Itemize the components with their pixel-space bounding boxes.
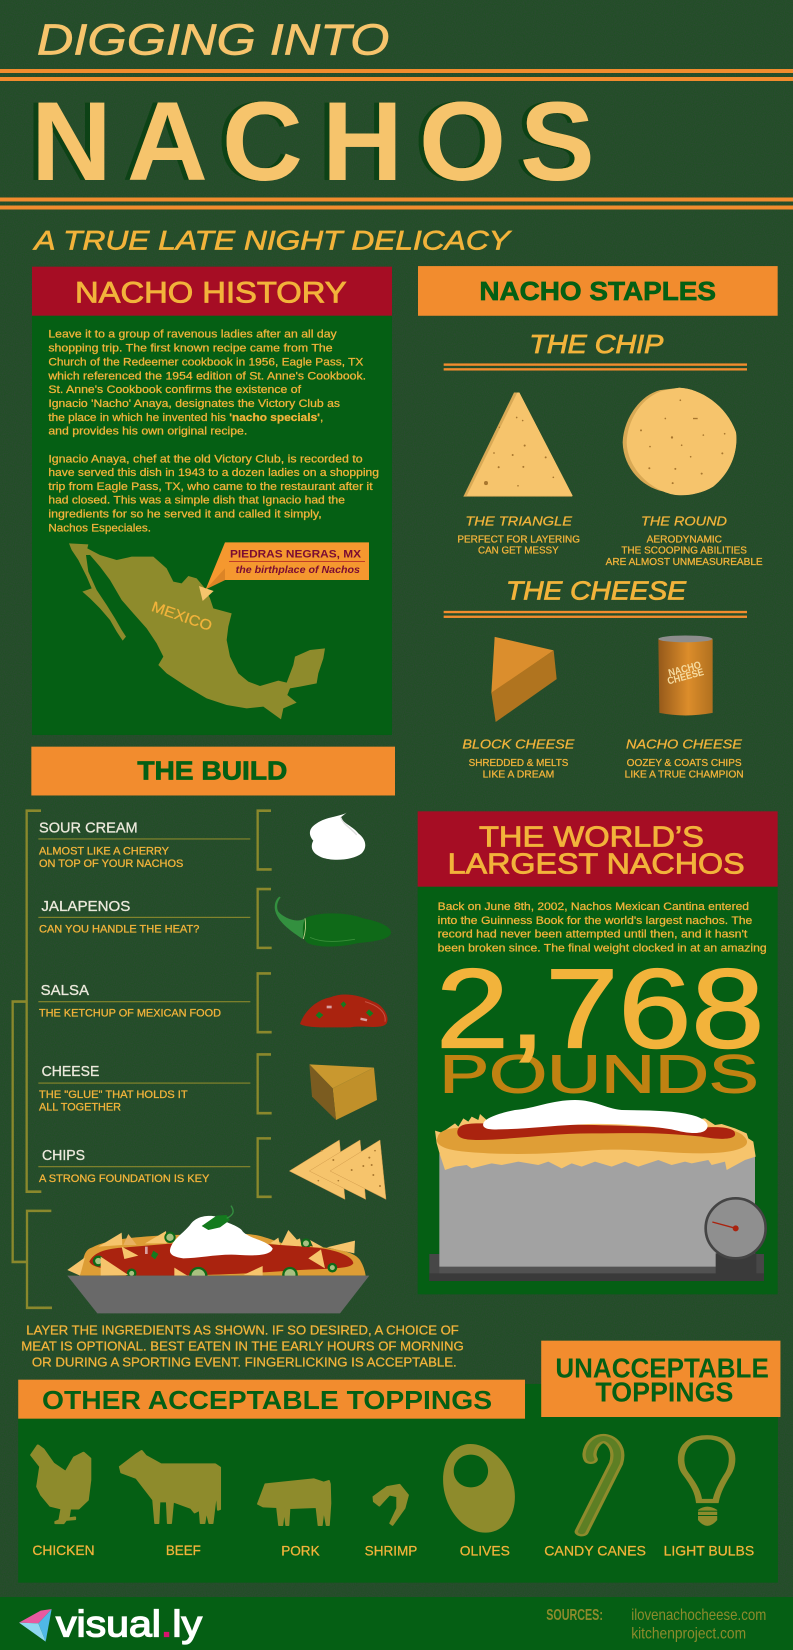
the round caption: THE ROUND — [641, 513, 728, 528]
panel: nacho history — [32, 267, 392, 735]
the triangle caption — [457, 513, 580, 557]
nacho cheese caption: OOZEY & COATS CHIPS — [627, 758, 742, 769]
layer: sour cream: ON TOP OF YOUR NACHOS — [39, 857, 183, 870]
topping labels: SHRIMP — [365, 1543, 417, 1559]
history text: which referenced the 1954 edition of St. Anne's Cookbook. — [47, 370, 366, 382]
panel background — [418, 887, 778, 1294]
callout: piedras negras: the birthplace of Nachos — [236, 565, 360, 576]
panel background — [32, 316, 392, 735]
salsa bits — [145, 1247, 148, 1254]
block cheese caption: LIKE A DREAM — [483, 769, 554, 781]
the round caption: AERODYNAMIC — [647, 535, 722, 546]
chips layer — [435, 1114, 756, 1170]
the triangle caption: PERFECT FOR LAYERING — [457, 535, 580, 546]
layer: cheese: CHEESE — [42, 1062, 99, 1079]
history text: and provides his own original recipe. — [48, 426, 247, 438]
salsa layer — [457, 1123, 735, 1140]
heading: other acceptable toppings: OTHER ACCEPTABLE TOPPINGS — [42, 1386, 492, 1414]
record text: been broken since. The final weight clocked in at an amazing — [438, 943, 767, 955]
layer: cheese: ALL TOGETHER — [39, 1101, 121, 1114]
layer: chips — [38, 1146, 250, 1185]
icon: scale gauge — [706, 1198, 766, 1258]
title: digging into: DIGGING INTO — [37, 15, 389, 64]
block cheese caption: SHREDDED & MELTS — [469, 758, 569, 769]
logo: visual.ly: visual.ly — [56, 1604, 203, 1645]
icon: cheese can: CHEESE — [666, 667, 705, 687]
icon: pig — [258, 1479, 330, 1525]
nacho slab on scale — [439, 1153, 755, 1267]
build heading bar — [31, 747, 395, 795]
record text: record had never been attempted until then, and it hasn't — [438, 929, 747, 941]
cheese base — [80, 1234, 366, 1276]
topping labels: CANDY CANES — [544, 1543, 646, 1559]
topping labels — [32, 1543, 754, 1559]
topping labels: CHICKEN — [32, 1543, 95, 1558]
history text: the place in which he invented his 'nacho specials', — [48, 412, 323, 424]
nacho cheese caption: NACHO CHEESE — [626, 736, 742, 751]
subtitle: A TRUE LATE NIGHT DELICACY — [33, 226, 512, 256]
chip rule — [444, 363, 747, 371]
salsa layer — [89, 1242, 353, 1276]
cheese layer — [437, 1127, 747, 1154]
footer — [0, 1597, 793, 1650]
icon: triangle chip — [463, 392, 573, 497]
record text: into the Guinness Book for the world's largest nachos. The — [438, 915, 752, 927]
instructions text: LAYER THE INGREDIENTS AS SHOWN. IF SO DESIRED, A CHOICE OF — [26, 1323, 459, 1337]
icon: cow — [120, 1451, 220, 1523]
icon: candy cane — [582, 1439, 617, 1532]
layer: salsa: SALSA — [41, 982, 90, 998]
history text: Church of the Redeemer cookbook in 1956, Eagle Pass, TX — [48, 356, 364, 368]
right brackets — [258, 811, 272, 1197]
the round caption: ARE ALMOST UNMEASUREABLE — [606, 557, 763, 568]
layer: jalapenos — [38, 897, 250, 935]
sources — [546, 1606, 766, 1642]
title: nachos: NACHOS — [31, 79, 595, 204]
orange double rule top — [0, 69, 793, 81]
heading text: THE WORLD’S — [479, 822, 704, 854]
block cheese caption — [462, 736, 575, 781]
cheese rule — [444, 611, 747, 618]
icon: shrimp — [373, 1484, 408, 1525]
layer: salsa: THE KETCHUP OF MEXICAN FOOD — [39, 1007, 221, 1020]
callout: piedras negras: PIEDRAS NEGRAS, MX — [230, 548, 362, 560]
nacho cheese caption: LIKE A TRUE CHAMPION — [625, 769, 744, 781]
icon: cheese can: NACHO — [667, 660, 702, 679]
topping labels: OLIVES — [460, 1543, 510, 1559]
instructions text — [21, 1323, 464, 1369]
toppings background — [18, 1384, 778, 1583]
layer: sour cream: ALMOST LIKE A CHERRY — [39, 845, 169, 857]
layer: sour cream: SOUR CREAM — [39, 819, 138, 836]
history heading bar — [32, 267, 392, 316]
back jalapeno slices — [165, 1233, 310, 1247]
top chips — [101, 1247, 325, 1276]
icon: chicken — [31, 1445, 90, 1523]
topping labels: PORK — [281, 1543, 320, 1559]
block cheese caption: BLOCK CHEESE — [462, 736, 575, 751]
icon: cheese can — [658, 636, 713, 715]
icon: sour cream — [310, 813, 365, 860]
history text: Nachos Especiales. — [48, 522, 151, 534]
heading: nacho staples: NACHO STAPLES — [479, 278, 716, 306]
left brackets — [13, 811, 52, 1308]
icon: jalapeno — [275, 897, 391, 946]
instructions text: OR DURING A SPORTING EVENT. FINGERLICKING IS ACCEPTABLE. — [32, 1355, 457, 1369]
layer: cheese — [38, 1062, 250, 1114]
sour cream layer — [483, 1100, 708, 1133]
icon: block cheese — [491, 637, 557, 722]
icon: light bulb — [681, 1437, 732, 1526]
jalapeno slices — [94, 1257, 336, 1284]
the round caption: THE SCOOPING ABILITIES — [621, 546, 748, 557]
panel: toppings — [18, 1323, 780, 1583]
heading text: LARGEST NACHOS — [448, 848, 745, 880]
history text: ingredients for so he served it and called it simply, — [48, 509, 322, 521]
layer: jalapenos: CAN YOU HANDLE THE HEAT? — [39, 923, 199, 935]
heading text — [448, 822, 745, 880]
sources: SOURCES: — [546, 1606, 603, 1624]
history text — [47, 329, 379, 534]
heading: nacho history: NACHO HISTORY — [75, 276, 347, 309]
header block — [0, 15, 793, 256]
panel: nacho staples — [418, 266, 778, 781]
layer: salsa — [38, 982, 250, 1020]
callout: piedras negras — [206, 542, 369, 589]
big unit: pounds: POUNDS — [439, 1046, 759, 1105]
history text: Ignacio 'Nacho' Anaya, designates the Victory Club as — [48, 398, 341, 410]
history text: have served this dish in 1943 to a dozen ladies on a shopping — [48, 467, 379, 479]
layer: chips: A STRONG FOUNDATION IS KEY — [39, 1173, 209, 1185]
staples heading bar — [418, 266, 778, 316]
panel: world's largest nachos — [418, 811, 778, 1294]
nacho cheese caption — [625, 736, 744, 781]
acceptable heading bar — [18, 1380, 525, 1419]
layer: sour cream — [38, 819, 250, 870]
scale base — [429, 1254, 764, 1281]
history text: St. Anne's Cookbook confirms the existence of — [48, 384, 302, 396]
heading: the chip: THE CHIP — [529, 331, 664, 359]
the round caption — [606, 513, 763, 568]
history text: had closed. This was a simple dish that Ignacio had the — [48, 495, 345, 507]
scale stand — [716, 1253, 756, 1281]
record text — [438, 901, 767, 955]
heading: the build: THE BUILD — [137, 758, 287, 786]
footer bar — [0, 1597, 793, 1650]
history text: trip from Eagle Pass, TX, who came to the restaurant after it — [48, 481, 373, 493]
topping labels: BEEF — [166, 1543, 201, 1558]
serving plate — [67, 1276, 369, 1313]
illustration: plate of nachos — [67, 1206, 369, 1313]
layer: chips: CHIPS — [42, 1146, 85, 1163]
heading: unacceptable toppings — [555, 1352, 769, 1408]
ingredient icons — [275, 813, 391, 1199]
history text: shopping trip. The first known recipe came from The — [48, 343, 333, 355]
icon: cheese wedge — [309, 1064, 377, 1120]
icon: round chip — [623, 388, 736, 495]
instructions text: MEAT IS OPTIONAL. BEST EATEN IN THE EARLY HOURS OF MORNING — [21, 1339, 464, 1353]
big number: 2,768: 2,768 — [436, 945, 764, 1071]
history text: Leave it to a group of ravenous ladies after an all day — [48, 329, 337, 341]
the triangle caption: CAN GET MESSY — [478, 546, 559, 557]
orange double rule bottom — [0, 198, 793, 210]
icon: salsa — [300, 994, 388, 1027]
panel: the build — [13, 747, 395, 1308]
heading bar — [418, 811, 778, 887]
map of mexico — [69, 543, 325, 719]
icon: tortilla chips — [289, 1140, 386, 1199]
back chips — [67, 1230, 355, 1276]
map marker — [199, 586, 214, 601]
sour cream dollop — [170, 1216, 273, 1258]
history text: Ignacio Anaya, chef at the old Victory Club, is recorded to — [48, 453, 363, 465]
record text: Back on June 8th, 2002, Nachos Mexican Cantina entered — [438, 901, 749, 913]
the triangle caption: THE TRIANGLE — [465, 513, 572, 528]
map label mexico: MEXICO — [149, 599, 214, 635]
heading: the cheese: THE CHEESE — [506, 578, 687, 606]
layer: cheese: THE "GLUE" THAT HOLDS IT — [39, 1089, 188, 1101]
illustration: giant nachos — [435, 1100, 756, 1170]
layer: jalapenos: JALAPENOS — [41, 897, 130, 914]
jalapeno topper — [202, 1206, 233, 1230]
icon: olive — [443, 1444, 515, 1533]
unacceptable heading bar — [541, 1341, 780, 1417]
